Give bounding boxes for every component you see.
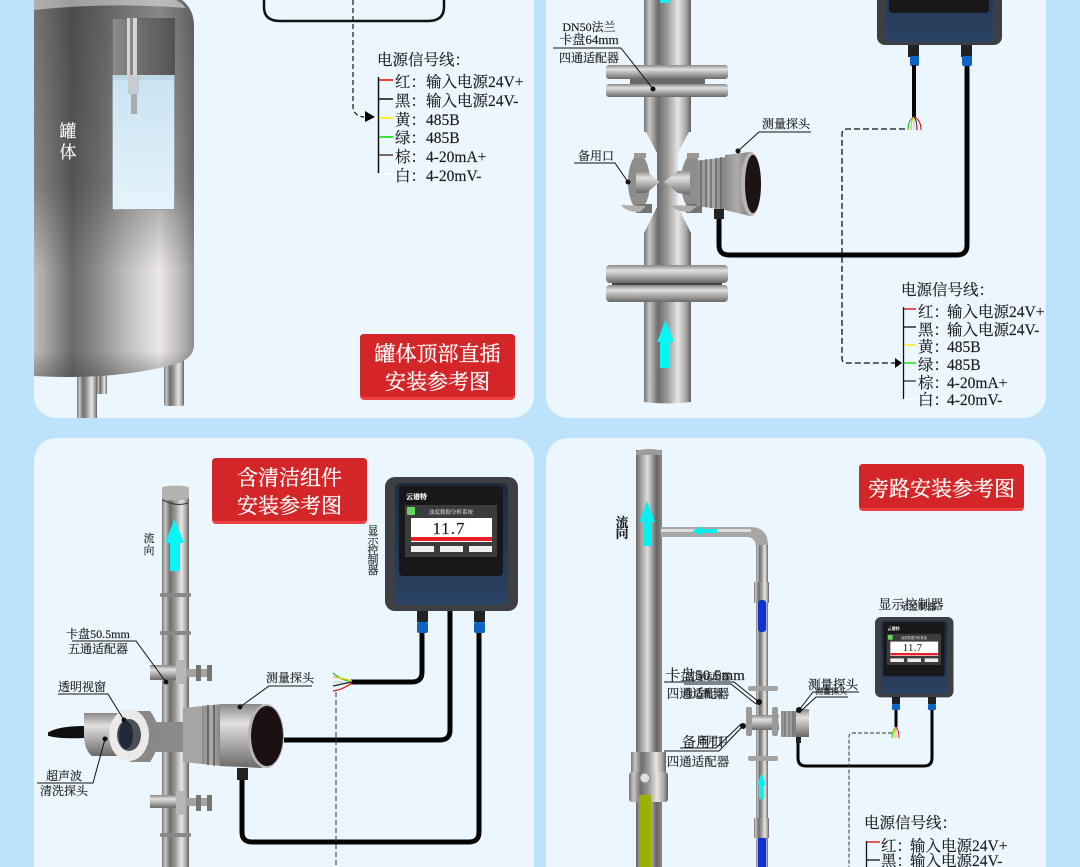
callout: ultrasonic cleaning probe: 清洗探头 [40,783,89,798]
callout: measuring probe: 测量探头 [762,116,811,131]
wire legend: 电源信号线： [901,281,994,299]
callout: ultrasonic cleaning probe [37,736,108,798]
callout: spare port and adapter [664,723,746,769]
flow arrow [165,519,184,571]
tank window [112,18,175,210]
measuring probe [781,709,809,743]
display controller: 11.7 [903,643,923,654]
wire legend: 485B [426,112,460,129]
wire legend: 4-20mA+ [947,375,1007,392]
flow arrows [657,0,674,368]
red title: cleaning assembly [212,458,367,524]
panel: flange installation [546,0,1046,418]
callout: measuring probe: 测量探头 [808,677,858,692]
pipe with flanges [606,0,728,404]
callout: flange adapter [553,19,656,92]
callout: five-way adapter [66,626,168,684]
callout: measuring probe: 测量探头 [815,686,848,696]
callout: clamp adapter: 通适配器 [683,688,723,700]
controller label: 示控制器 [900,601,936,612]
wire bundle [908,65,921,130]
red title: tank [360,334,515,400]
wire legend: 电源信号线： [377,51,470,69]
flow label [616,516,628,540]
callout: flange adapter: 四通适配器 [559,51,619,65]
wire legend: 485B [947,357,981,374]
wire legend: 棕： [918,374,949,392]
display controller: 浊度数据分析系统 [429,508,473,516]
wire legend: 4-20mA+ [426,149,486,166]
callout: measuring probe [238,670,315,710]
cables [242,611,479,842]
wire legend: 红： [881,837,912,855]
wire legend: 红： [918,303,949,321]
cable loop [264,0,444,21]
callout: measuring probe [796,677,859,713]
cable glands [417,611,485,633]
callout: transparent window [58,679,126,722]
controller label: 显示控制器 [878,597,944,612]
display controller: 11.7 [432,519,466,538]
wire legend: 输入电源24V- [426,92,518,110]
wire legend: 黄： [395,110,426,129]
controller label: 示 [368,534,380,547]
wire legend: 白： [918,391,949,409]
panel: with cleaning assembly [34,438,534,867]
vertical pipe [150,486,212,867]
callout: clamp adapter [664,666,762,705]
tank label: 罐 [60,122,76,141]
measuring probe [696,152,761,219]
red title: tank: 安装参考图 [385,370,490,394]
cleaning probe with window [49,709,159,762]
dashed signal line [849,733,892,867]
callout: transparent window: 透明视窗 [58,679,106,694]
flow label: 流 [615,515,629,530]
callout: spare port and adapter: 备用口 [698,734,728,747]
flow label: 向 [144,543,154,557]
display controller: 云谱特 [406,492,427,501]
flow label: 流 [144,531,154,545]
flow label [144,532,154,556]
flow arrows [639,501,766,799]
wire legend: 绿： [918,356,949,374]
dashed signal line with arrow [353,0,375,122]
panel: tank top insertion [20,0,534,418]
dashed signal line with arrow [842,129,905,368]
callout: flange adapter: 卡盘64mm [559,32,619,47]
wire legend [864,814,1007,867]
wire legend: 绿： [395,129,426,147]
red title: tank: 罐体顶部直插 [374,342,500,366]
cable probe to controller [719,64,967,255]
callout: five-way adapter: 卡盘50.5mm [66,626,130,641]
wire legend: 485B [947,339,981,356]
wire legend: 4-20mV- [426,168,481,185]
tank label [60,122,76,162]
controller label: 显 [368,524,378,537]
wire legend: 输入电源24V+ [426,73,523,91]
wire legend: 电源信号线： [864,814,957,832]
callout: spare port [574,149,630,184]
callout: measuring probe [736,116,811,154]
dashed signal line [336,692,337,865]
measuring probe [150,704,284,780]
tank label: 体 [60,143,76,162]
callout: spare port and adapter: 四通适配器 [667,755,730,769]
wire legend: 输入电源24V+ [947,303,1044,321]
wire bundle [333,673,352,691]
display controller [385,477,518,611]
display controller [875,617,953,697]
wire legend: 红： [395,73,426,91]
controller label: 器 [368,564,378,577]
red title: bypass [859,464,1024,511]
callout: clamp adapter: 四通适配器 [667,687,730,701]
callout: spare port: 备用口 [578,149,614,163]
red title: cleaning assembly: 安装参考图 [237,494,342,518]
tank vessel [20,0,194,418]
callout: ultrasonic cleaning probe: 超声波 [46,768,82,783]
wire legend: 棕： [395,148,426,166]
wire legend: 白： [395,167,426,185]
wire legend: 输入电源24V+ [910,837,1007,855]
callout: clamp adapter: 四通适配器 [685,671,731,682]
red title: bypass: 旁路安装参考图 [868,477,1015,501]
callout: five-way adapter: 五通适配器 [68,642,128,656]
wire legend: 黑： [918,321,949,339]
callout: flange adapter: DN50法兰 [562,19,616,34]
branch pipe [661,527,779,867]
panel: bypass installation [546,438,1046,867]
main pipe and valve [629,449,668,867]
wire legend [901,281,1044,409]
wire bundle [892,727,899,738]
wire legend: 4-20mV- [947,392,1002,409]
cable glands [892,697,936,710]
wire legend: 黄： [918,337,949,356]
wire legend: 输入电源24V- [947,321,1039,339]
display controller: 浊度数据分析系统 [901,635,928,640]
controller label: 制 [368,553,378,567]
controller label [368,524,378,576]
callout: measuring probe: 测量探头 [266,670,315,685]
flow label: 向 [615,526,629,541]
callout: clamp adapter: 卡盘50.5mm [665,666,745,684]
red title: cleaning assembly: 含清洁组件 [237,466,342,490]
wire legend: 485B [426,130,460,147]
wire legend: 黑： [395,92,426,110]
display controller partial [877,0,1002,66]
cross fitting and spare port [621,153,703,213]
callout: spare port and adapter: 备用口 [682,735,724,751]
cables [798,706,932,766]
wire legend [377,51,523,185]
controller label: 控 [368,543,378,557]
display controller: 云谱特 [887,625,901,631]
